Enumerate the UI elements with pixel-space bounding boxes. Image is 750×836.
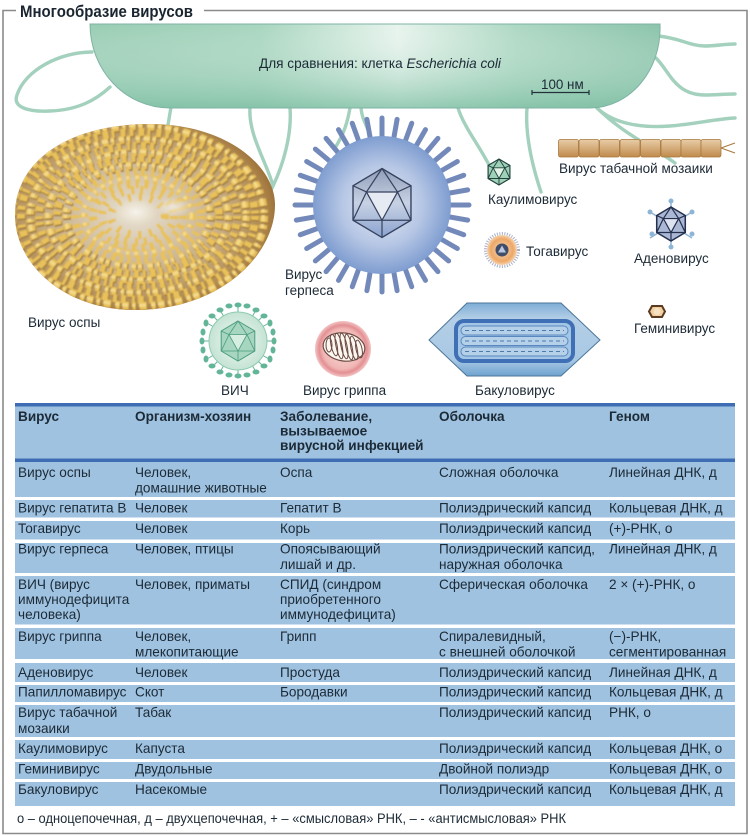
- label: influenza virus: Вирус гриппа: [303, 383, 387, 398]
- label: HIV: ВИЧ: [221, 383, 249, 398]
- row: adenovirus: Аденовирус: [18, 665, 93, 680]
- row: caulimovirus: Полиэдрический капсид: [439, 741, 591, 756]
- row: herpes virus: Полиэдрический капсид,: [439, 542, 595, 556]
- row: papillomavirus: Папилломавирус: [18, 684, 127, 700]
- row: HIV: Человек, приматы: [135, 577, 250, 592]
- row: caulimovirus: Капуста: [135, 741, 185, 756]
- row: geminivirus: [15, 762, 735, 779]
- icon: baculovirus: [429, 303, 600, 376]
- row: baculovirus: Полиэдрический капсид: [439, 782, 591, 797]
- row: tobacco mosaic virus: мозаики: [18, 721, 70, 736]
- row: togavirus: Корь: [280, 521, 310, 536]
- label: pox virus: Вирус оспы: [28, 315, 100, 330]
- row: influenza virus: Спиралевидный,: [439, 629, 546, 644]
- row: adenovirus: [15, 663, 735, 682]
- row: influenza virus: млекопитающие: [135, 644, 239, 660]
- row: pox virus: Сложная оболочка: [439, 465, 559, 480]
- icon: poxvirus: [11, 124, 275, 310]
- row: herpes virus: наружная оболочка: [439, 557, 563, 572]
- label: caulimovirus: Каулимовирус: [488, 192, 578, 207]
- row: caulimovirus: Кольцевая ДНК, о: [609, 741, 722, 756]
- table header row: вирусной инфекцией: [280, 438, 424, 453]
- row: pox virus: Человек,: [135, 465, 191, 480]
- row: herpes virus: Опоясывающий: [280, 542, 381, 556]
- row: adenovirus: Простуда: [280, 665, 340, 680]
- row: tobacco mosaic virus: Полиэдрический капсид: [439, 705, 591, 720]
- row: papillomavirus: Бородавки: [280, 684, 348, 700]
- row: togavirus: Человек: [135, 521, 188, 536]
- row: hepatitis B virus: Полиэдрический капсид: [439, 500, 591, 516]
- row: baculovirus: Кольцевая ДНК, д: [609, 782, 723, 797]
- table header row: Организм-хозяин: [135, 409, 251, 424]
- icon: adenovirus: [648, 198, 694, 250]
- row: hepatitis B virus: Вирус гепатита В: [18, 500, 126, 516]
- row: herpes virus: Человек, птицы: [135, 542, 234, 556]
- row: togavirus: (+)-РНК, о: [609, 521, 672, 536]
- row: tobacco mosaic virus: [15, 705, 735, 737]
- row: influenza virus: Вирус гриппа: [18, 629, 102, 644]
- row: papillomavirus: Кольцевая ДНК, д: [609, 684, 723, 700]
- E. coli cell: [90, 24, 660, 108]
- table header row: Вирус: [18, 409, 60, 424]
- row: pox virus: домашние животные: [135, 480, 267, 496]
- row: adenovirus: Человек: [135, 665, 188, 680]
- row: hepatitis B virus: Гепатит В: [280, 500, 342, 516]
- row: baculovirus: Бакуловирус: [18, 782, 99, 797]
- row: tobacco mosaic virus: Табак: [135, 705, 172, 720]
- row: hepatitis B virus: Человек: [135, 500, 188, 516]
- table header row: вызываемое: [280, 424, 368, 438]
- row: geminivirus: Двудольные: [135, 762, 213, 776]
- row: influenza virus: [15, 628, 735, 660]
- icon: HIV: [200, 302, 276, 378]
- cell caption: Для сравнения: клетка Escherichia coli: [259, 56, 502, 71]
- row: papillomavirus: Скот: [135, 684, 164, 700]
- row: hepatitis B virus: [15, 500, 735, 518]
- row: adenovirus: Линейная ДНК, д: [609, 665, 717, 680]
- icon: herpes virus: [295, 118, 469, 292]
- label: togavirus: Тогавирус: [526, 244, 589, 259]
- row: HIV: иммунодефицита: [18, 592, 130, 607]
- table header row: Оболочка: [439, 409, 505, 424]
- row: herpes virus: Линейная ДНК, д: [609, 542, 717, 556]
- table: [15, 403, 735, 806]
- row: HIV: ВИЧ (вирус: [18, 577, 90, 592]
- footnote: о – одноцепочечная, д – двухцепочечная, + – «смысловая» РНК, – - «антисмысловая» РНК: [17, 811, 566, 826]
- icon: geminivirus: [649, 306, 665, 317]
- label: geminivirus: Геминивирус: [634, 321, 715, 336]
- scale bar: 100 нм: [541, 77, 584, 92]
- label: herpes virus: Вирус: [285, 267, 322, 282]
- row: influenza virus: с внешней оболочкой: [439, 644, 576, 660]
- row: HIV: приобретенного: [280, 592, 381, 607]
- row: HIV: [15, 576, 735, 624]
- row: geminivirus: Кольцевая ДНК, о: [609, 762, 722, 776]
- row: HIV: Сферическая оболочка: [439, 577, 588, 592]
- row: influenza virus: (−)-РНК,: [609, 629, 661, 644]
- row: geminivirus: Двойной полиэдр: [439, 762, 549, 776]
- row: pox virus: Оспа: [280, 465, 313, 480]
- row: pox virus: Вирус оспы: [18, 465, 91, 480]
- label: baculovirus: Бакуловирус: [475, 383, 555, 398]
- row: hepatitis B virus: Кольцевая ДНК, д: [609, 500, 723, 516]
- row: togavirus: [15, 521, 735, 540]
- row: pox virus: [15, 462, 735, 497]
- row: HIV: 2 × (+)-РНК, о: [609, 577, 696, 592]
- icon: togavirus: [486, 234, 518, 266]
- icon: influenza virus: [315, 321, 371, 377]
- table header row: Геном: [609, 409, 650, 424]
- row: influenza virus: Человек,: [135, 629, 191, 644]
- title: Многообразие вирусов: [20, 2, 193, 21]
- row: togavirus: Тогавирус: [18, 521, 81, 536]
- row: geminivirus: Геминивирус: [18, 762, 100, 776]
- row: influenza virus: сегментированная: [609, 644, 726, 660]
- row: papillomavirus: Полиэдрический капсид: [439, 684, 591, 700]
- row: pox virus: Линейная ДНК, д: [609, 465, 717, 480]
- row: papillomavirus: [15, 684, 735, 702]
- row: herpes virus: Вирус герпеса: [18, 542, 109, 556]
- flagella of the cell: [16, 36, 735, 192]
- row: tobacco mosaic virus: Вирус табачной: [18, 705, 117, 720]
- row: HIV: СПИД (синдром: [280, 577, 381, 592]
- row: influenza virus: Грипп: [280, 629, 316, 644]
- icon: caulimovirus: [488, 159, 510, 185]
- row: HIV: иммунодефицита): [280, 607, 396, 622]
- label: herpes virus: герпеса: [285, 283, 334, 298]
- label: adenovirus: Аденовирус: [634, 251, 709, 266]
- row: caulimovirus: [15, 740, 735, 759]
- row: tobacco mosaic virus: РНК, о: [609, 705, 651, 720]
- row: caulimovirus: Каулимовирус: [18, 741, 108, 756]
- row: baculovirus: Насекомые: [135, 782, 207, 797]
- row: baculovirus: [15, 782, 735, 806]
- row: herpes virus: [15, 542, 735, 573]
- table header row: Заболевание,: [280, 409, 372, 424]
- row: adenovirus: Полиэдрический капсид: [439, 665, 591, 680]
- row: herpes virus: лишай и др.: [280, 557, 356, 572]
- label: tobacco mosaic virus: Вирус табачной мозаики: [559, 161, 713, 176]
- table header row: [15, 403, 735, 462]
- row: togavirus: Полиэдрический капсид: [439, 521, 591, 536]
- scale bar: [532, 77, 589, 95]
- icon: tobacco mosaic virus: [558, 140, 735, 157]
- row: HIV: человека): [18, 607, 81, 622]
